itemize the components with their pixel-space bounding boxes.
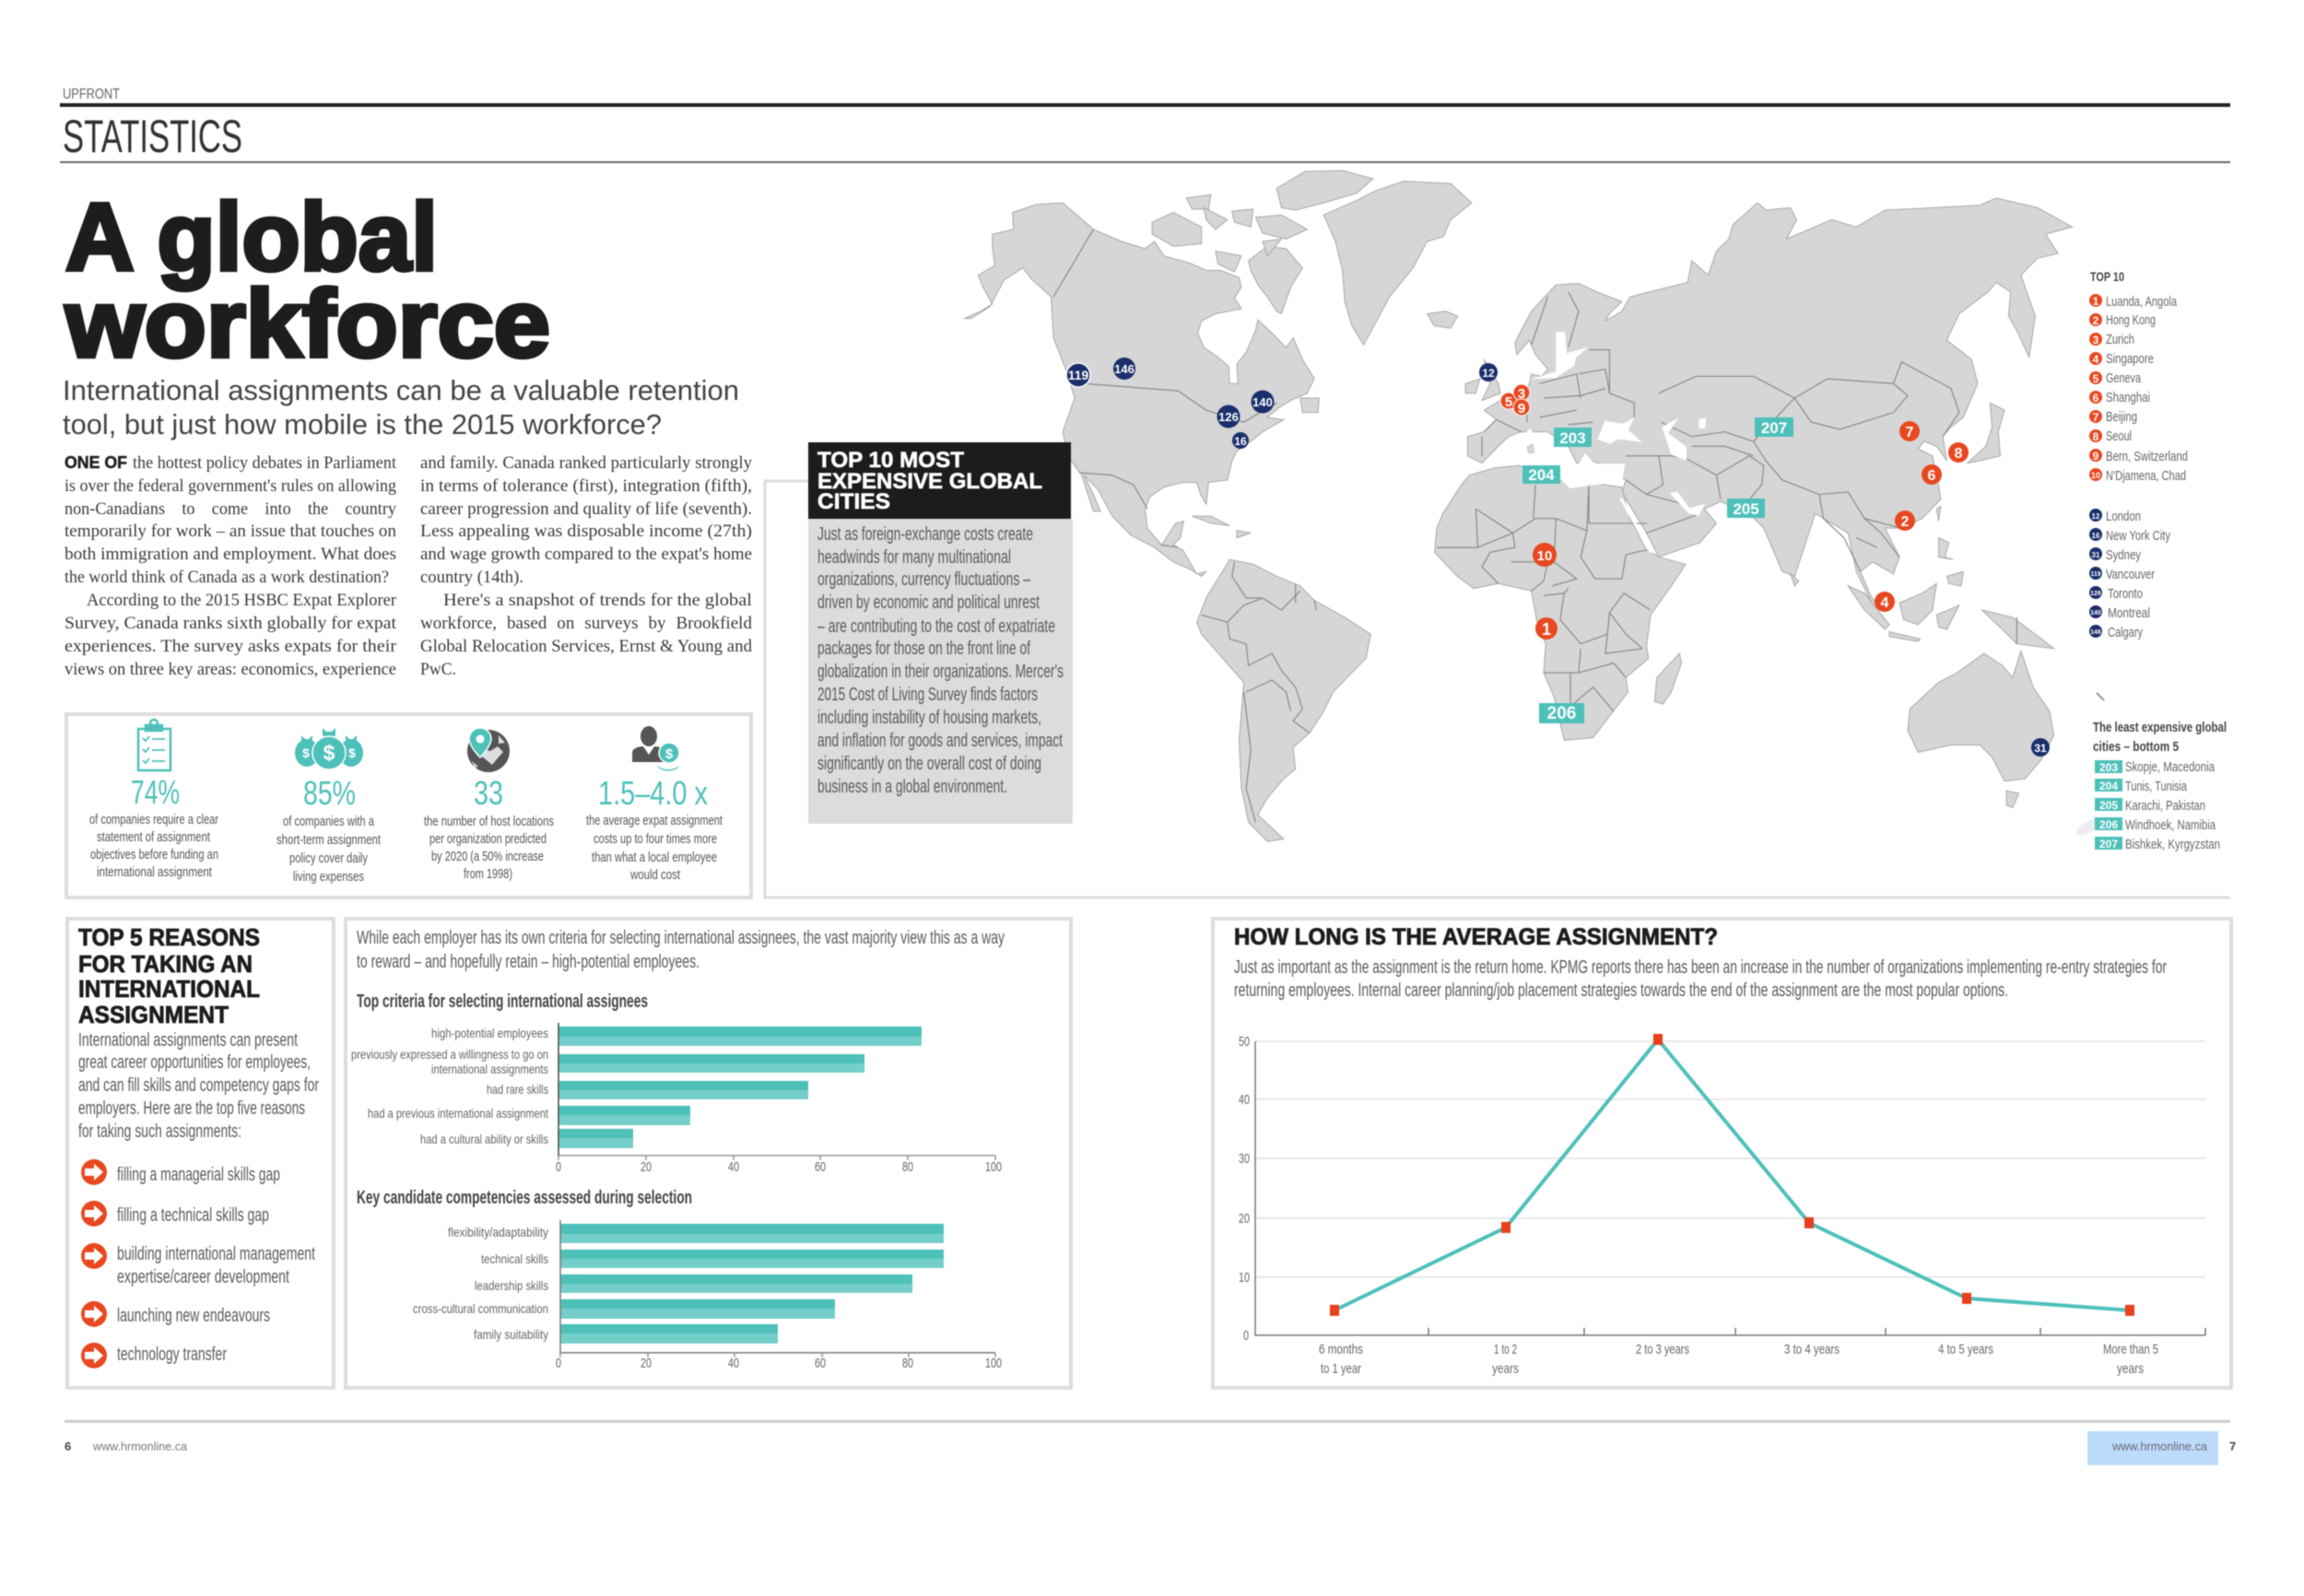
section heading: statistics: STATISTICS bbox=[63, 111, 242, 162]
intro text: left column: both immigration and employment. What does bbox=[65, 546, 396, 564]
map markers: top 10 cities: 4 bbox=[1881, 595, 1889, 611]
line chart: assignment length: 3 to 4 years bbox=[1784, 1342, 1840, 1357]
stat: 74%: 74% bbox=[131, 773, 180, 811]
panel text: packages for those on the front line of bbox=[817, 639, 1030, 659]
map markers: top 10 cities: 3 bbox=[1518, 386, 1525, 402]
legend: top 10 cities: 7 bbox=[2093, 411, 2099, 424]
reason 2 bbox=[81, 1201, 269, 1226]
legend: top 10 cities: Singapore bbox=[2106, 351, 2154, 367]
map: Americas and Greenland bbox=[964, 170, 1472, 841]
icon: money bags: $ bbox=[323, 741, 335, 765]
stat: 33 bbox=[424, 774, 554, 882]
bar chart: key competencies: leadership skills bbox=[475, 1278, 548, 1293]
reason 4: launching new endeavours bbox=[117, 1306, 270, 1326]
intro text: left column: temporarily for work – an issue that touches on bbox=[65, 522, 396, 541]
intro text: left column: ONE OF bbox=[65, 453, 127, 472]
stat: 85%: 85% bbox=[303, 774, 356, 812]
legend: other cities: Toronto bbox=[2108, 586, 2143, 602]
legend: top 10 cities: Shanghai bbox=[2106, 390, 2150, 405]
panel heading: CITIES bbox=[817, 489, 890, 514]
world map bbox=[964, 170, 2073, 841]
panel text: – are contributing to the cost of expatriate bbox=[817, 616, 1055, 637]
panel text: organizations, currency fluctuations – bbox=[817, 569, 1031, 590]
stat: 85%: living expenses bbox=[293, 869, 364, 885]
line chart: assignment length: years bbox=[1492, 1361, 1519, 1377]
map markers: Canadian and world cities: 12 bbox=[1482, 367, 1495, 380]
bar chart: key competencies bbox=[413, 1220, 1002, 1371]
line chart: assignment length: 6 months bbox=[1319, 1342, 1363, 1357]
legend: other cities: 31 bbox=[2092, 551, 2100, 559]
legend: top 10 cities: 10 bbox=[2091, 471, 2100, 480]
line chart: assignment length: 2 to 3 years bbox=[1636, 1342, 1689, 1357]
map markers: bottom 5 cities: 204 bbox=[1528, 466, 1555, 484]
legend: other cities: 146 bbox=[2090, 629, 2101, 636]
footer: right url tab and page number bbox=[2087, 1431, 2236, 1465]
map: inland seas and Europe detail bbox=[1477, 332, 1707, 553]
subtitle: tool, but just how mobile is the 2015 workforce? bbox=[63, 408, 662, 440]
legend: least expensive cities: 204 bbox=[2099, 780, 2118, 792]
panel intro text: While each employer has its own criteria for selecting international assignees, the vast majority view this as a way bbox=[357, 928, 1005, 948]
subtitle: International assignments can be a valuable retention bbox=[63, 374, 739, 406]
bar chart: top criteria: 0 bbox=[556, 1159, 561, 1175]
panel text: and inflation for goods and services, impact bbox=[817, 731, 1063, 751]
intro text: right column: Less appealing was disposable income (27th) bbox=[420, 522, 752, 541]
legend: top 10 cities: Beijing bbox=[2106, 409, 2137, 425]
stat: 33: the number of host locations bbox=[424, 814, 554, 829]
reason 3 bbox=[81, 1243, 315, 1287]
bar chart: key competencies: technical skills bbox=[481, 1251, 548, 1266]
panel heading: ASSIGNMENT bbox=[78, 1001, 229, 1028]
map markers: Canadian and world cities: 16 bbox=[1234, 435, 1247, 448]
bar chart: key competencies: flexibility/adaptability bbox=[448, 1225, 548, 1239]
panel text: 2015 Cost of Living Survey finds factors bbox=[817, 685, 1038, 705]
panel text bbox=[817, 524, 1064, 797]
intro text: right column: career progression and quality of life (seventh). bbox=[420, 500, 752, 519]
legend: other cities: London bbox=[2106, 509, 2141, 524]
panel text: employers. Here are the top five reasons bbox=[78, 1098, 305, 1119]
legend: least expensive cities: 206 bbox=[2099, 818, 2118, 831]
intro text: right column bbox=[420, 454, 753, 679]
bar chart: top criteria: 40 bbox=[728, 1159, 739, 1175]
icon: money bags: $ bbox=[302, 745, 310, 760]
title bbox=[65, 184, 550, 378]
stat: 74% bbox=[89, 773, 218, 880]
legend: top 10 cities: Bern, Switzerland bbox=[2106, 449, 2188, 464]
icon: money bags bbox=[295, 728, 363, 769]
legend: top 10 cities: 6 bbox=[2093, 392, 2099, 405]
map markers: Canadian and world cities bbox=[1066, 358, 2050, 757]
legend: top 10 cities: 4 bbox=[2093, 353, 2099, 366]
legend: top 10 cities: Luanda, Angola bbox=[2106, 294, 2177, 310]
panel text: Just as foreign-exchange costs create bbox=[817, 524, 1033, 545]
map markers: Canadian and world cities: 146 bbox=[1114, 362, 1134, 376]
panel: average assignment length bbox=[1213, 919, 2231, 1388]
panel heading: TOP 10 MOST bbox=[817, 448, 964, 473]
panel heading: INTERNATIONAL bbox=[78, 975, 260, 1003]
legend: least expensive cities: The least expensive global bbox=[2093, 720, 2227, 735]
panel heading: HOW LONG IS THE AVERAGE ASSIGNMENT? bbox=[1234, 924, 1718, 950]
stat: 74%: international assignment bbox=[97, 864, 213, 880]
legend: least expensive cities bbox=[2093, 720, 2227, 852]
line chart: assignment length: 40 bbox=[1239, 1092, 1250, 1108]
panel frame: map bbox=[765, 481, 2230, 898]
bar chart: top criteria: international assignments bbox=[431, 1062, 548, 1076]
legend: top 10 cities bbox=[2089, 269, 2188, 484]
reason 5: technology transfer bbox=[117, 1344, 227, 1365]
map markers: top 10 cities: 2 bbox=[1901, 514, 1910, 530]
legend: other cities: New York City bbox=[2106, 528, 2170, 544]
bar chart: top criteria: 60 bbox=[815, 1159, 826, 1175]
panel text: business in a global environment. bbox=[817, 777, 1007, 797]
map markers: bottom 5 cities: 207 bbox=[1761, 419, 1787, 437]
stat: 1.5–4.0 x: the average expat assignment bbox=[586, 813, 723, 828]
icon: person with coin: $ bbox=[665, 746, 674, 762]
intro text: left column bbox=[65, 453, 397, 679]
bar chart: top criteria: high-potential employees bbox=[431, 1026, 548, 1040]
stat: 85%: short-term assignment bbox=[276, 832, 382, 848]
reason 5 bbox=[81, 1343, 227, 1368]
panel text bbox=[1234, 957, 2167, 1001]
intro text: left column: non-Canadians to come into the country bbox=[65, 500, 397, 519]
intro text: right column: and wage growth compared to the expat's home bbox=[420, 546, 752, 564]
bar chart: key competencies: 80 bbox=[902, 1355, 913, 1371]
map markers: bottom 5 cities: 206 bbox=[1547, 704, 1576, 723]
icon: money bags: $ bbox=[348, 745, 356, 760]
legend: other cities: 126 bbox=[2090, 591, 2101, 597]
stat: 33: by 2020 (a 50% increase bbox=[431, 849, 544, 864]
map: Eurasia, Africa, Oceania bbox=[1435, 198, 2073, 808]
legend: top 10 cities: 1 bbox=[2093, 295, 2099, 308]
bar chart: top criteria: had a previous international assignment bbox=[368, 1106, 548, 1121]
legend: other cities: 12 bbox=[2092, 512, 2100, 521]
map markers: bottom 5 cities: 205 bbox=[1733, 500, 1759, 518]
map markers: Canadian and world cities: 126 bbox=[1218, 410, 1239, 424]
subtitle bbox=[63, 374, 739, 440]
stat: 74%: of companies require a clear bbox=[89, 812, 218, 827]
intro text: left column: Survey, Canada ranks sixth globally for expat bbox=[65, 615, 397, 633]
panel text: globalization in their organizations. Mercer's bbox=[817, 662, 1064, 682]
map markers: top 10 cities: 6 bbox=[1928, 468, 1936, 484]
bar chart: top criteria: 80 bbox=[902, 1159, 913, 1175]
stat: 33: from 1998) bbox=[464, 866, 512, 882]
line chart: assignment length: More than 5 bbox=[2103, 1342, 2158, 1357]
map markers: top 10 cities bbox=[1500, 384, 1969, 640]
stat: 33: 33 bbox=[474, 774, 503, 812]
legend: top 10 cities: N'Djamena, Chad bbox=[2106, 468, 2186, 484]
panel text: International assignments can present bbox=[78, 1030, 298, 1050]
map markers: bottom 5 cities: 203 bbox=[1559, 429, 1586, 447]
legend: least expensive cities: Windhoek, Namibia bbox=[2125, 817, 2216, 833]
panel: top 10 most expensive global cities bbox=[808, 442, 1073, 824]
legend: least expensive cities: Tunis, Tunisia bbox=[2125, 779, 2187, 794]
map markers: top 10 cities: 10 bbox=[1537, 548, 1552, 564]
legend: top 10 cities: 3 bbox=[2093, 334, 2099, 346]
legend: other cities: Sydney bbox=[2106, 547, 2141, 563]
intro text: left column: is over the federal government's rules on allowing bbox=[65, 477, 396, 496]
legend: least expensive cities: Karachi, Pakistan bbox=[2125, 798, 2205, 814]
panel: top 5 reasons bbox=[67, 919, 334, 1388]
panel text: for taking such assignments: bbox=[78, 1121, 241, 1142]
panel: selection criteria bbox=[346, 919, 1071, 1388]
reason 3: building international management bbox=[117, 1244, 315, 1264]
bar chart: top criteria: 100 bbox=[985, 1159, 1002, 1175]
legend: top 10 cities: 5 bbox=[2093, 372, 2099, 385]
icon: person with coin bbox=[632, 726, 679, 770]
legend: other cities: 119 bbox=[2090, 571, 2101, 578]
intro text: left column: views on three key areas: economics, experience bbox=[65, 661, 396, 679]
legend: top 10 cities: Hong Kong bbox=[2106, 312, 2156, 328]
reason 1: filling a managerial skills gap bbox=[117, 1165, 280, 1185]
legend: other cities: Calgary bbox=[2108, 625, 2143, 640]
section label: upfront: UPFRONT bbox=[63, 87, 120, 102]
line chart: assignment length: 50 bbox=[1239, 1034, 1250, 1050]
line chart: assignment length: years bbox=[2117, 1361, 2144, 1377]
bar chart: top criteria: previously expressed a willingness to go on bbox=[351, 1047, 548, 1062]
intro text: left column: According to the 2015 HSBC Expat Explorer bbox=[87, 592, 396, 610]
chart heading: key competencies: Key candidate competencies assessed during selection bbox=[357, 1188, 692, 1208]
icon: globe with pin bbox=[467, 728, 510, 772]
line chart: assignment length: 4 to 5 years bbox=[1938, 1342, 1993, 1357]
legend: top 10 cities: Seoul bbox=[2106, 428, 2132, 444]
legend: top 10 cities: 2 bbox=[2093, 314, 2099, 327]
bar chart: key competencies: 60 bbox=[815, 1355, 826, 1371]
intro text: left column: the world think of Canada as a work destination? bbox=[65, 569, 389, 587]
panel heading bbox=[817, 448, 1042, 514]
intro text: right column: and family. Canada ranked particularly strongly bbox=[420, 454, 753, 473]
line chart: assignment length: 30 bbox=[1239, 1151, 1250, 1167]
legend: least expensive cities: 203 bbox=[2099, 761, 2118, 774]
stat: 85%: of companies with a bbox=[283, 814, 374, 829]
bar chart: top criteria bbox=[351, 1023, 1002, 1175]
bar chart: key competencies: 20 bbox=[641, 1355, 652, 1371]
footer rule bbox=[65, 1420, 2230, 1423]
footer: left page number and url: 6 bbox=[65, 1439, 71, 1453]
legend: least expensive cities: Bishkek, Kyrgyzstan bbox=[2125, 837, 2220, 852]
intro text: left column: the hottest policy debates in Parliament bbox=[133, 454, 397, 473]
panel intro text bbox=[357, 928, 1005, 972]
chart heading: top criteria: Top criteria for selecting international assignees bbox=[357, 992, 648, 1012]
reason 4 bbox=[81, 1301, 270, 1327]
bar chart: key competencies: family suitability bbox=[474, 1327, 548, 1342]
title: A global bbox=[65, 184, 438, 291]
panel heading bbox=[78, 923, 260, 1028]
map markers: top 10 cities: 5 bbox=[1505, 394, 1512, 410]
stat: 1.5–4.0 x: costs up to four times more bbox=[594, 831, 717, 847]
stat: 1.5–4.0 x: 1.5–4.0 x bbox=[598, 774, 708, 812]
bar chart: key competencies: cross-cultural communication bbox=[413, 1301, 548, 1316]
intro text: right column: Global Relocation Services, Ernst & Young and bbox=[420, 638, 753, 656]
map markers: top 10 cities: 7 bbox=[1906, 425, 1914, 440]
panel heading: TOP 5 REASONS bbox=[78, 923, 260, 951]
legend: least expensive cities: cities – bottom 5 bbox=[2093, 739, 2179, 755]
legend: least expensive cities: 205 bbox=[2099, 799, 2118, 812]
reason 3: expertise/career development bbox=[117, 1267, 289, 1287]
map markers: Canadian and world cities: 119 bbox=[1068, 368, 1089, 382]
reason 2: filling a technical skills gap bbox=[117, 1205, 269, 1226]
legend: top 10 cities: 9 bbox=[2093, 450, 2099, 463]
legend: other cities: 140 bbox=[2090, 610, 2101, 616]
bar chart: top criteria: 20 bbox=[641, 1159, 652, 1175]
intro text: right column: in terms of tolerance (first), integration (fifth), bbox=[420, 477, 752, 496]
legend: other cities: 16 bbox=[2092, 532, 2100, 540]
map markers: top 10 cities: 8 bbox=[1955, 446, 1963, 462]
panel heading: EXPENSIVE GLOBAL bbox=[817, 469, 1042, 494]
footer: left page number and url: www.hrmonline.ca bbox=[92, 1439, 188, 1453]
bar chart: key competencies: 40 bbox=[728, 1355, 739, 1371]
line chart: assignment length: 0 bbox=[1243, 1328, 1249, 1344]
panel text: significantly on the overall cost of doing bbox=[817, 754, 1041, 774]
legend: least expensive cities: Skopje, Macedonia bbox=[2125, 759, 2215, 775]
legend: top 10 cities: Geneva bbox=[2106, 370, 2141, 386]
legend: other cities bbox=[2089, 509, 2170, 640]
map markers: top 10 cities: 1 bbox=[1542, 620, 1551, 639]
bar chart: key competencies: 0 bbox=[556, 1355, 561, 1371]
bar chart: key competencies: 100 bbox=[985, 1355, 1002, 1371]
panel intro text: to reward – and hopefully retain – high-potential employees. bbox=[357, 952, 699, 972]
line chart: assignment length: 10 bbox=[1239, 1270, 1250, 1285]
legend: least expensive cities: 207 bbox=[2099, 838, 2118, 851]
bar chart: top criteria: had a cultural ability or skills bbox=[420, 1132, 548, 1146]
panel text: including instability of housing markets, bbox=[817, 708, 1041, 728]
stat: 1.5–4.0 x: than what a local employee bbox=[592, 850, 717, 865]
stat: 85%: policy cover daily bbox=[289, 851, 368, 866]
footer: right url tab and page number: 7 bbox=[2229, 1439, 2236, 1453]
panel text: and can fill skills and competency gaps for bbox=[78, 1075, 319, 1096]
line chart: assignment length: to 1 year bbox=[1321, 1361, 1361, 1377]
legend: top 10 cities: Zurich bbox=[2106, 332, 2134, 347]
panel text: great career opportunities for employees, bbox=[78, 1052, 311, 1073]
legend: top 10 cities: TOP 10 bbox=[2090, 269, 2124, 284]
line chart: assignment length bbox=[1239, 1034, 2205, 1377]
panel: key statistics bbox=[66, 714, 751, 898]
intro text: left column: experiences. The survey asks expats for their bbox=[65, 638, 396, 656]
reason 1 bbox=[81, 1159, 280, 1185]
line chart: assignment length: 1 to 2 bbox=[1494, 1342, 1517, 1357]
panel heading: FOR TAKING AN bbox=[78, 950, 253, 978]
map markers: top 10 cities: 9 bbox=[1518, 401, 1525, 417]
stat: 74%: objectives before funding an bbox=[90, 847, 218, 863]
panel text bbox=[78, 1030, 319, 1142]
legend: top 10 cities: 8 bbox=[2093, 430, 2099, 443]
stat: 74%: statement of assignment bbox=[97, 829, 211, 845]
intro text: right column: PwC. bbox=[420, 661, 456, 679]
legend: other cities: Vancouver bbox=[2106, 567, 2155, 582]
stat: 33: per organization predicted bbox=[429, 831, 547, 847]
line chart: assignment length: 20 bbox=[1239, 1211, 1250, 1226]
intro text: right column: workforce, based on surveys by Brookfield bbox=[420, 615, 753, 633]
panel text: headwinds for many multinational bbox=[817, 547, 1011, 568]
map fragment: New Zealand bbox=[2074, 693, 2105, 839]
intro text: right column: Here's a snapshot of trends for the global bbox=[443, 592, 752, 610]
intro text: right column: country (14th). bbox=[420, 569, 523, 587]
stat: 1.5–4.0 x: would cost bbox=[629, 867, 681, 883]
title: workforce bbox=[65, 271, 550, 378]
map markers: Canadian and world cities: 31 bbox=[2034, 742, 2047, 755]
stat: 1.5–4.0 x bbox=[586, 774, 723, 883]
legend: other cities: Montreal bbox=[2108, 605, 2150, 621]
stat: 85% bbox=[276, 774, 382, 885]
bar chart: top criteria: had rare skills bbox=[487, 1082, 548, 1097]
map markers: Canadian and world cities: 140 bbox=[1252, 395, 1273, 409]
map markers: bottom 5 cities bbox=[1522, 417, 1793, 723]
icon: clipboard bbox=[138, 720, 170, 770]
panel text: driven by economic and political unrest bbox=[817, 593, 1040, 613]
footer: right url tab and page number: www.hrmonline.ca bbox=[2111, 1439, 2208, 1453]
